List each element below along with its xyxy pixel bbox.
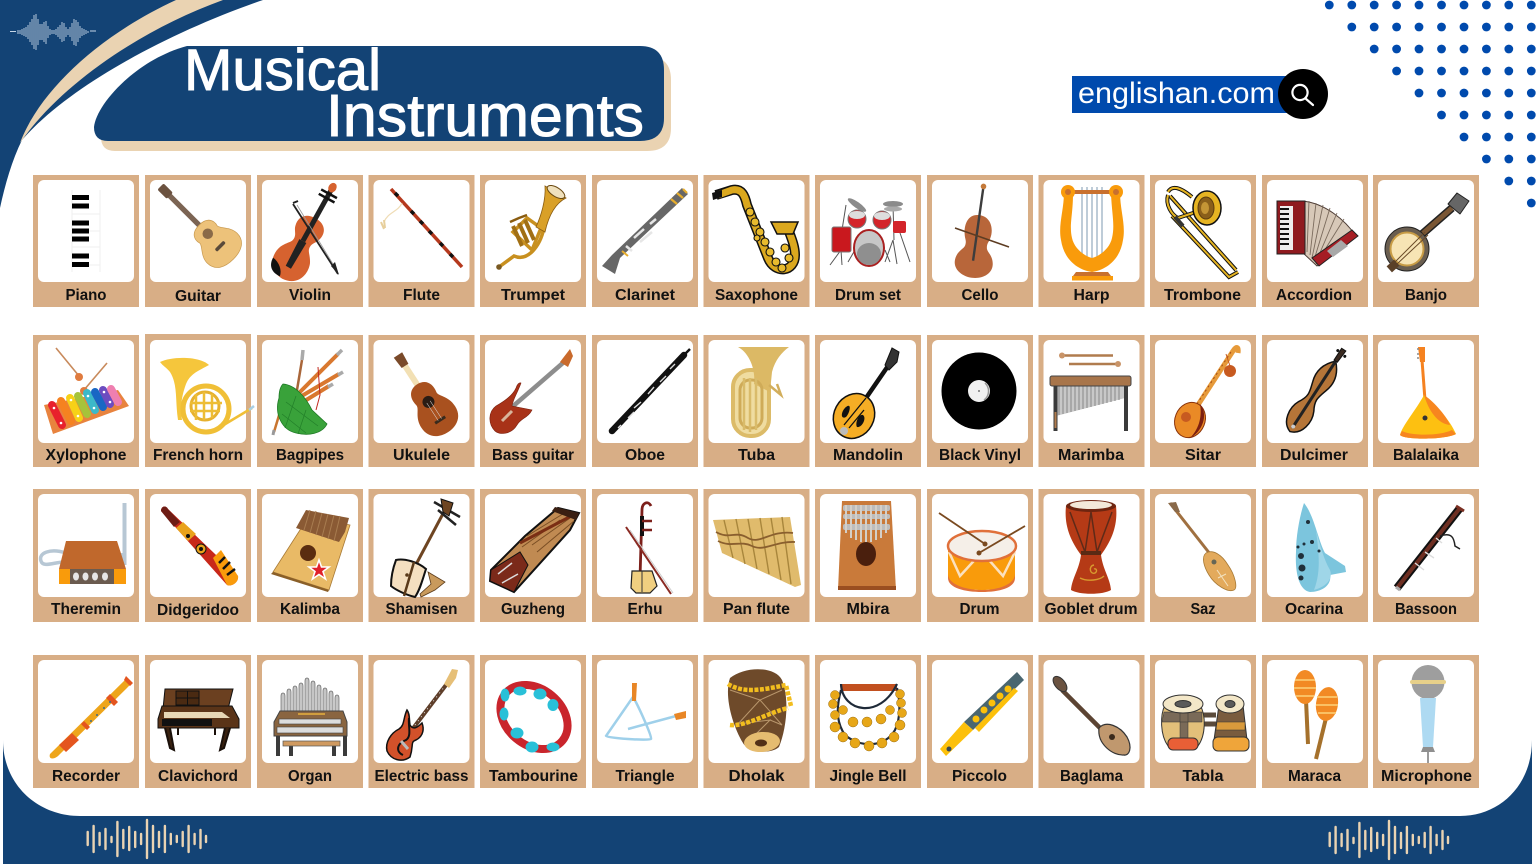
label: Guzheng xyxy=(501,601,565,618)
label: Mandolin xyxy=(833,447,903,464)
card: Erhu xyxy=(592,489,698,622)
label: Saz xyxy=(1190,601,1216,618)
card: Tuba xyxy=(704,335,810,467)
card: Marimba xyxy=(1038,335,1144,467)
label: Cello xyxy=(962,287,998,304)
label: Pan flute xyxy=(723,601,790,618)
label: Oboe xyxy=(625,447,665,464)
icon: recorder xyxy=(50,676,133,758)
icon: dholak xyxy=(728,669,791,753)
card: Flute xyxy=(368,175,474,307)
label: Electric bass xyxy=(374,768,468,785)
icon: xylophone xyxy=(44,348,129,434)
label: Recorder xyxy=(52,768,120,785)
label: Dulcimer xyxy=(1280,447,1348,464)
label: Harp xyxy=(1074,287,1110,304)
label: Balalaika xyxy=(1393,447,1459,464)
label: Marimba xyxy=(1058,447,1124,464)
label: Saxophone xyxy=(715,287,798,304)
card: Kalimba xyxy=(257,489,363,622)
icon: trombone xyxy=(1167,188,1238,277)
card: Clavichord xyxy=(145,655,251,788)
icon: bass guitar xyxy=(490,349,573,433)
card: Triangle xyxy=(592,655,698,788)
label: Didgeridoo xyxy=(157,602,239,619)
label: Drum set xyxy=(835,287,901,304)
icon: maraca xyxy=(1294,670,1340,759)
icon: bagpipes xyxy=(273,350,343,435)
card: Jingle Bell xyxy=(815,655,921,788)
card: Organ xyxy=(257,655,363,788)
label: Goblet drum xyxy=(1044,601,1138,618)
label: Guitar xyxy=(175,288,221,305)
card: Didgeridoo xyxy=(145,489,251,622)
card: Pan flute xyxy=(704,489,810,622)
card: Tabla xyxy=(1150,655,1256,788)
card: Xylophone xyxy=(33,335,139,467)
icon: kalimba xyxy=(271,510,350,592)
card: Harp xyxy=(1038,175,1144,307)
label: Triangle xyxy=(616,768,675,785)
icon: drum xyxy=(939,513,1025,592)
label: Dholak xyxy=(728,768,785,785)
title text: Instruments xyxy=(326,83,644,149)
card: Mbira xyxy=(815,489,921,622)
icon: bottom-left sound wave xyxy=(88,820,206,858)
card: Saz xyxy=(1150,489,1256,622)
label: French horn xyxy=(153,447,243,464)
card: Microphone xyxy=(1373,655,1479,788)
website search bar: englishan.com xyxy=(1078,77,1275,110)
label: Ocarina xyxy=(1285,601,1343,618)
card: Trombone xyxy=(1150,175,1256,307)
card: Theremin xyxy=(33,489,139,622)
card: Balalaika xyxy=(1373,335,1479,467)
card: Guzheng xyxy=(480,489,586,622)
icon: clarinet xyxy=(602,188,688,274)
label: Flute xyxy=(403,287,440,304)
icon: accordion xyxy=(1277,201,1358,266)
icon: drum set xyxy=(830,196,910,266)
label: Trumpet xyxy=(501,287,565,304)
label: Black Vinyl xyxy=(939,447,1021,464)
label: Theremin xyxy=(51,601,121,618)
card: Drum set xyxy=(815,175,921,307)
icon: mandolin xyxy=(826,348,899,446)
card: Banjo xyxy=(1373,175,1479,307)
card: Recorder xyxy=(33,655,139,788)
card: Maraca xyxy=(1262,655,1368,788)
card: Clarinet xyxy=(592,175,698,307)
icon: microphone xyxy=(1410,665,1446,763)
card: Oboe xyxy=(592,335,698,467)
card: Bassoon xyxy=(1373,489,1479,622)
label: Bassoon xyxy=(1395,601,1457,618)
card: Piano xyxy=(33,175,139,307)
dot pattern xyxy=(1325,1,1536,207)
card: Mandolin xyxy=(815,335,921,467)
card: Ukulele xyxy=(368,335,474,467)
label: Bass guitar xyxy=(492,447,574,464)
icon: erhu xyxy=(626,503,673,594)
icon: French horn xyxy=(160,358,254,432)
icon: bottom-right sound wave xyxy=(1330,821,1448,859)
icon: balalaika xyxy=(1400,347,1456,439)
icon: banjo xyxy=(1385,193,1469,272)
icon: guitar xyxy=(146,172,248,274)
label: Drum xyxy=(960,601,1000,618)
card: Baglama xyxy=(1038,655,1144,788)
card: Dholak xyxy=(704,655,810,788)
label: Violin xyxy=(289,287,331,304)
card: Accordion xyxy=(1262,175,1368,307)
icon: piano xyxy=(72,190,100,272)
label: Erhu xyxy=(628,601,662,618)
icon: tambourine xyxy=(488,672,580,762)
label: Jingle Bell xyxy=(830,768,906,785)
label: Tambourine xyxy=(489,768,578,785)
icon: ukulele xyxy=(381,344,465,443)
label: Bagpipes xyxy=(276,447,344,464)
label: Xylophone xyxy=(46,447,127,464)
label: Clarinet xyxy=(615,287,675,304)
icon: oboe xyxy=(612,349,690,431)
icon: jingle bell xyxy=(828,684,906,751)
icon: shamisen xyxy=(391,499,460,597)
icon: clavichord xyxy=(158,689,239,750)
icon: flute xyxy=(381,189,462,267)
icon: tabla xyxy=(1162,695,1249,751)
icon: theremin xyxy=(41,503,126,584)
card: Black Vinyl xyxy=(927,335,1033,467)
card: Sitar xyxy=(1150,335,1256,467)
label: Kalimba xyxy=(280,601,340,618)
icon: saz xyxy=(1168,502,1236,591)
card: Shamisen xyxy=(368,489,474,622)
label: Mbira xyxy=(846,601,890,618)
icon: electric bass xyxy=(387,669,458,760)
icon: pan flute xyxy=(713,517,801,587)
card: Bass guitar xyxy=(480,335,586,467)
card: Bagpipes xyxy=(257,335,363,467)
icon: black vinyl xyxy=(942,352,1016,430)
label: Baglama xyxy=(1060,768,1123,785)
icon: cello xyxy=(953,181,1009,280)
label: Piccolo xyxy=(952,768,1007,785)
card: Goblet drum xyxy=(1038,489,1144,622)
label: Piano xyxy=(66,287,106,304)
label: Tuba xyxy=(738,447,775,464)
icon: mbira xyxy=(838,501,896,590)
icon: saxophone xyxy=(712,190,798,272)
card: Dulcimer xyxy=(1262,335,1368,467)
label: Trombone xyxy=(1164,287,1241,304)
icon: marimba xyxy=(1050,352,1131,431)
title text xyxy=(184,38,644,149)
card: Guitar xyxy=(145,172,251,307)
icon: sitar xyxy=(1169,347,1238,442)
card: Electric bass xyxy=(368,655,474,788)
label: Sitar xyxy=(1185,447,1221,464)
card: Violin xyxy=(257,174,363,307)
card: Trumpet xyxy=(480,175,586,307)
icon: harp xyxy=(1060,185,1124,280)
card: Saxophone xyxy=(704,175,810,307)
tan swoosh accent xyxy=(20,0,223,143)
label: Ukulele xyxy=(393,447,450,464)
label: Banjo xyxy=(1405,287,1447,304)
icon: baglama xyxy=(1050,674,1130,755)
label: Clavichord xyxy=(158,768,238,785)
icon: ocarina xyxy=(1296,503,1346,592)
website search bar xyxy=(1072,69,1328,119)
icon: violin xyxy=(266,174,351,288)
label: Microphone xyxy=(1381,768,1472,785)
card: Cello xyxy=(927,175,1033,307)
label: Shamisen xyxy=(386,601,458,618)
label: Accordion xyxy=(1276,287,1352,304)
top-left navy swoosh xyxy=(0,0,263,208)
icon: tuba xyxy=(733,347,789,436)
icon: dulcimer xyxy=(1280,343,1353,438)
icon: goblet drum xyxy=(1066,500,1116,594)
card: Piccolo xyxy=(927,655,1033,788)
icon: magnifier xyxy=(1292,85,1313,105)
icon: bassoon xyxy=(1396,506,1464,590)
label: Maraca xyxy=(1288,768,1341,785)
title text: Musical xyxy=(184,38,381,103)
icon: guzheng xyxy=(490,507,579,592)
icon: top-left sound wave xyxy=(10,14,96,50)
card: Tambourine xyxy=(480,655,586,788)
icon: didgeridoo xyxy=(161,507,238,585)
title banner xyxy=(94,38,671,151)
icon: triangle xyxy=(606,683,686,740)
icon: trumpet xyxy=(496,183,567,270)
bottom navy band xyxy=(3,740,1532,864)
icon: piccolo xyxy=(940,672,1024,756)
icon: organ xyxy=(274,678,347,756)
label: Organ xyxy=(288,768,332,785)
card: French horn xyxy=(145,334,254,467)
card: Drum xyxy=(927,489,1033,622)
card: Ocarina xyxy=(1262,489,1368,622)
label: Tabla xyxy=(1182,768,1224,785)
